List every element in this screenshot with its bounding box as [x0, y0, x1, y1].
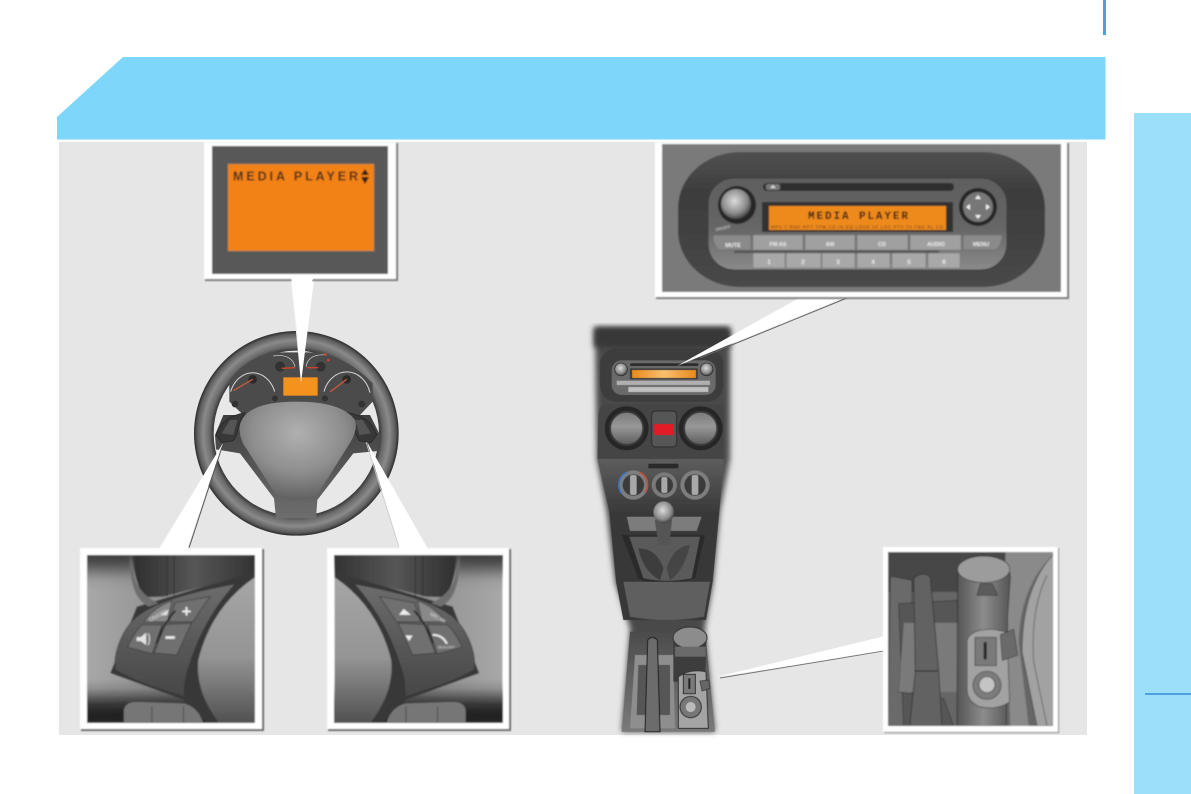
pointer: radio to console [677, 297, 847, 366]
console radio [600, 348, 723, 402]
callout: USB and AUX sockets [883, 547, 1059, 733]
callout: right wheel switches [313, 533, 526, 736]
instrument cluster [229, 352, 373, 415]
cup tube [957, 556, 1010, 726]
cd slot [763, 183, 954, 191]
on/off knob [715, 186, 756, 232]
button row one: MENU [973, 242, 989, 248]
center console illustration [594, 327, 730, 732]
on/off knob: ON/OFF [715, 224, 732, 232]
rear tunnel [622, 627, 715, 732]
plus minus speaker glyphs: + [182, 602, 192, 621]
orange screen [228, 164, 374, 251]
top-right page marker [1103, 0, 1106, 35]
aux socket [973, 671, 1001, 699]
callout: right wheel switches: SEA-OFF [438, 644, 455, 649]
button row one: AM [826, 242, 835, 248]
groove [734, 250, 939, 253]
pointer: USB to console [716, 636, 885, 678]
preset buttons: 6 [942, 260, 946, 266]
button row one: AUDIO [927, 242, 946, 248]
pointer: left switches [159, 443, 223, 549]
hub airbag [240, 402, 356, 500]
preset buttons: 5 [907, 260, 911, 266]
pointer: right switches [366, 442, 428, 549]
flap [1000, 629, 1018, 660]
arrow and source glyphs [399, 609, 411, 615]
spokes [215, 415, 380, 518]
panel: steering wheel [194, 331, 399, 536]
button row one [713, 235, 1002, 250]
socket plate [967, 629, 1010, 708]
sidebar tab [1134, 113, 1191, 794]
header band [57, 57, 1106, 140]
gear knob [653, 501, 674, 545]
carpet area [1005, 552, 1053, 726]
left recess [888, 576, 912, 726]
preset buttons: 2 [801, 260, 805, 266]
bezel [678, 152, 1045, 287]
switch pod right [348, 413, 377, 443]
up down arrows [361, 169, 369, 184]
callout: left wheel switches: ON/OFF [148, 609, 170, 624]
hazard button [654, 424, 674, 435]
callout: right wheel switches: SRC OK [429, 611, 448, 625]
lower horn switches [124, 701, 203, 723]
button row one: MUTE [725, 243, 741, 249]
screen text: MEDIA PLAYER [233, 170, 358, 184]
cluster orange display [283, 377, 318, 396]
callout: radio head unit [655, 142, 1069, 299]
steering column [134, 555, 255, 597]
callout: dashboard display [204, 142, 398, 281]
preset buttons: 1 [767, 260, 771, 266]
climate panel [597, 459, 724, 512]
display screen [769, 206, 946, 230]
dark band [110, 572, 255, 725]
pointer: display to wheel [291, 280, 314, 383]
preset buttons: 3 [836, 260, 840, 266]
vent panel [597, 404, 724, 459]
preset buttons: 4 [871, 260, 875, 266]
buttons [144, 601, 172, 622]
preset buttons [753, 253, 960, 268]
console soft silhouette [595, 328, 730, 732]
wheel rim [194, 331, 399, 536]
rocker divider [156, 611, 175, 643]
lever [910, 574, 942, 726]
gear surround [609, 512, 719, 620]
pod [115, 584, 235, 697]
top dash strip [594, 327, 730, 347]
switch pod left [216, 413, 245, 443]
button row one: FM AS [770, 242, 787, 248]
panel: grey illustration background [59, 142, 1087, 735]
radio face [708, 178, 1007, 270]
button row one: CD [878, 242, 886, 248]
display screen: MP3 // RND RPT TPM CD-IN EQ LOUD AF LOC PTY TA FMS RL CD [771, 224, 944, 230]
display frame [762, 202, 953, 232]
callout: left wheel switches [64, 533, 277, 736]
display screen: MEDIA PLAYER [808, 211, 908, 223]
navigation pad [959, 188, 997, 226]
